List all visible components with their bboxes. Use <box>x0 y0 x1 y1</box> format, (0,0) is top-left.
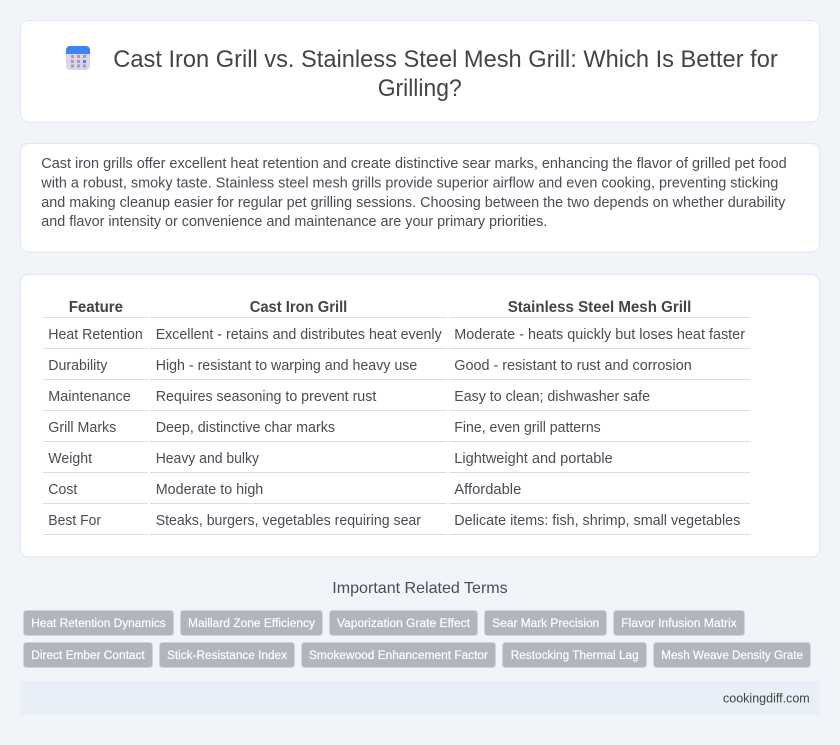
table row: grill marks: Deep, distinctive char marks <box>156 420 335 436</box>
title <box>113 46 778 102</box>
table row: best for: Delicate items: fish, shrimp, small vegetables <box>454 513 740 529</box>
table row: grill marks: Fine, even grill patterns <box>454 420 601 436</box>
table row: maintenance: Easy to clean; dishwasher safe <box>454 389 650 405</box>
table row: maintenance: Requires seasoning to prevent rust <box>156 389 376 405</box>
footer text: cookingdiff.com <box>723 690 810 705</box>
panel: comparison table <box>20 274 820 557</box>
table row: heat retention: Heat Retention <box>48 327 143 343</box>
tag: flavor infusion matrix: Flavor Infusion Matrix <box>621 616 737 630</box>
table row: grill marks <box>43 420 750 442</box>
tag: vaporization grate effect <box>330 610 478 636</box>
tag: direct ember contact: Direct Ember Contact <box>31 648 145 662</box>
table row: durability <box>43 358 750 380</box>
tag: vaporization grate effect: Vaporization Grate Effect <box>337 616 471 630</box>
panel: introduction <box>20 144 820 252</box>
tag: stick-resistance index <box>160 642 294 668</box>
tag: direct ember contact <box>24 642 152 668</box>
tag: stick-resistance index: Stick-Resistance Index <box>167 648 288 662</box>
text block: introduction paragraph <box>40 156 787 230</box>
text block: introduction paragraph: Cast iron grills offer excellent heat retention and create distinctive sear marks, enhancing the flavor of grilled pet food <box>41 156 787 172</box>
table header: Feature <box>69 299 123 316</box>
table row: maintenance <box>43 389 750 411</box>
table row: durability: Durability <box>48 358 108 374</box>
table row: weight <box>43 451 750 473</box>
table row: heat retention: Excellent - retains and distributes heat evenly <box>156 327 442 343</box>
tag list: related terms <box>24 610 810 668</box>
table row: cost: Cost <box>48 482 77 498</box>
tag: mesh weave density grate <box>654 642 810 668</box>
table row: cost: Affordable <box>454 482 521 498</box>
table row: grill marks: Grill Marks <box>48 420 116 436</box>
table row: heat retention: Moderate - heats quickly but loses heat faster <box>454 327 745 343</box>
table row: weight: Lightweight and portable <box>454 451 613 467</box>
title: Grilling? <box>378 75 462 102</box>
tag: maillard zone efficiency: Maillard Zone Efficiency <box>188 616 316 630</box>
tag: restocking thermal lag: Restocking Thermal Lag <box>511 648 639 662</box>
table row: cost <box>43 482 750 504</box>
tag: sear mark precision: Sear Mark Precision <box>492 616 599 630</box>
table row: best for: Best For <box>48 513 101 529</box>
tag: maillard zone efficiency <box>180 610 322 636</box>
tag: sear mark precision <box>484 610 606 636</box>
table header <box>43 299 750 318</box>
text block: introduction paragraph: with a robust, smoky taste. Stainless steel mesh grills provide superior airflow and even cooking, preventing sticking <box>40 175 778 191</box>
tag: heat retention dynamics <box>24 610 174 636</box>
table header: Cast Iron Grill <box>250 299 347 316</box>
table row: maintenance: Maintenance <box>48 389 131 405</box>
table row: durability: Good - resistant to rust and corrosion <box>454 358 692 374</box>
table row: heat retention <box>43 327 750 349</box>
tag: smokewood enhancement factor: Smokewood Enhancement Factor <box>309 648 488 662</box>
table row: weight: Heavy and bulky <box>156 451 260 467</box>
tag: mesh weave density grate: Mesh Weave Density Grate <box>661 648 803 662</box>
table row: weight: Weight <box>48 451 92 467</box>
icon: calendar <box>66 46 90 70</box>
tag: smokewood enhancement factor <box>302 642 496 668</box>
title: Cast Iron Grill vs. Stainless Steel Mesh Grill: Which Is Better for <box>113 46 778 73</box>
tag: heat retention dynamics: Heat Retention Dynamics <box>31 616 166 630</box>
text block: introduction paragraph: and making cleanup easier for regular pet grilling sessions. Choosing between the two depends on whether durability <box>41 195 786 211</box>
table row: best for: Steaks, burgers, vegetables requiring sear <box>156 513 421 529</box>
text block: introduction paragraph: and flavor intensity or convenience and maintenance are your primary priorities. <box>41 214 547 230</box>
footer <box>20 681 820 715</box>
heading: related terms: Important Related Terms <box>332 580 508 597</box>
tag: flavor infusion matrix <box>614 610 744 636</box>
tag: restocking thermal lag <box>502 642 646 668</box>
table row: best for <box>43 513 750 535</box>
table row: cost: Moderate to high <box>156 482 263 498</box>
table row: durability: High - resistant to warping and heavy use <box>156 358 417 374</box>
table header: Stainless Steel Mesh Grill <box>508 299 691 316</box>
panel: title card <box>20 20 820 122</box>
